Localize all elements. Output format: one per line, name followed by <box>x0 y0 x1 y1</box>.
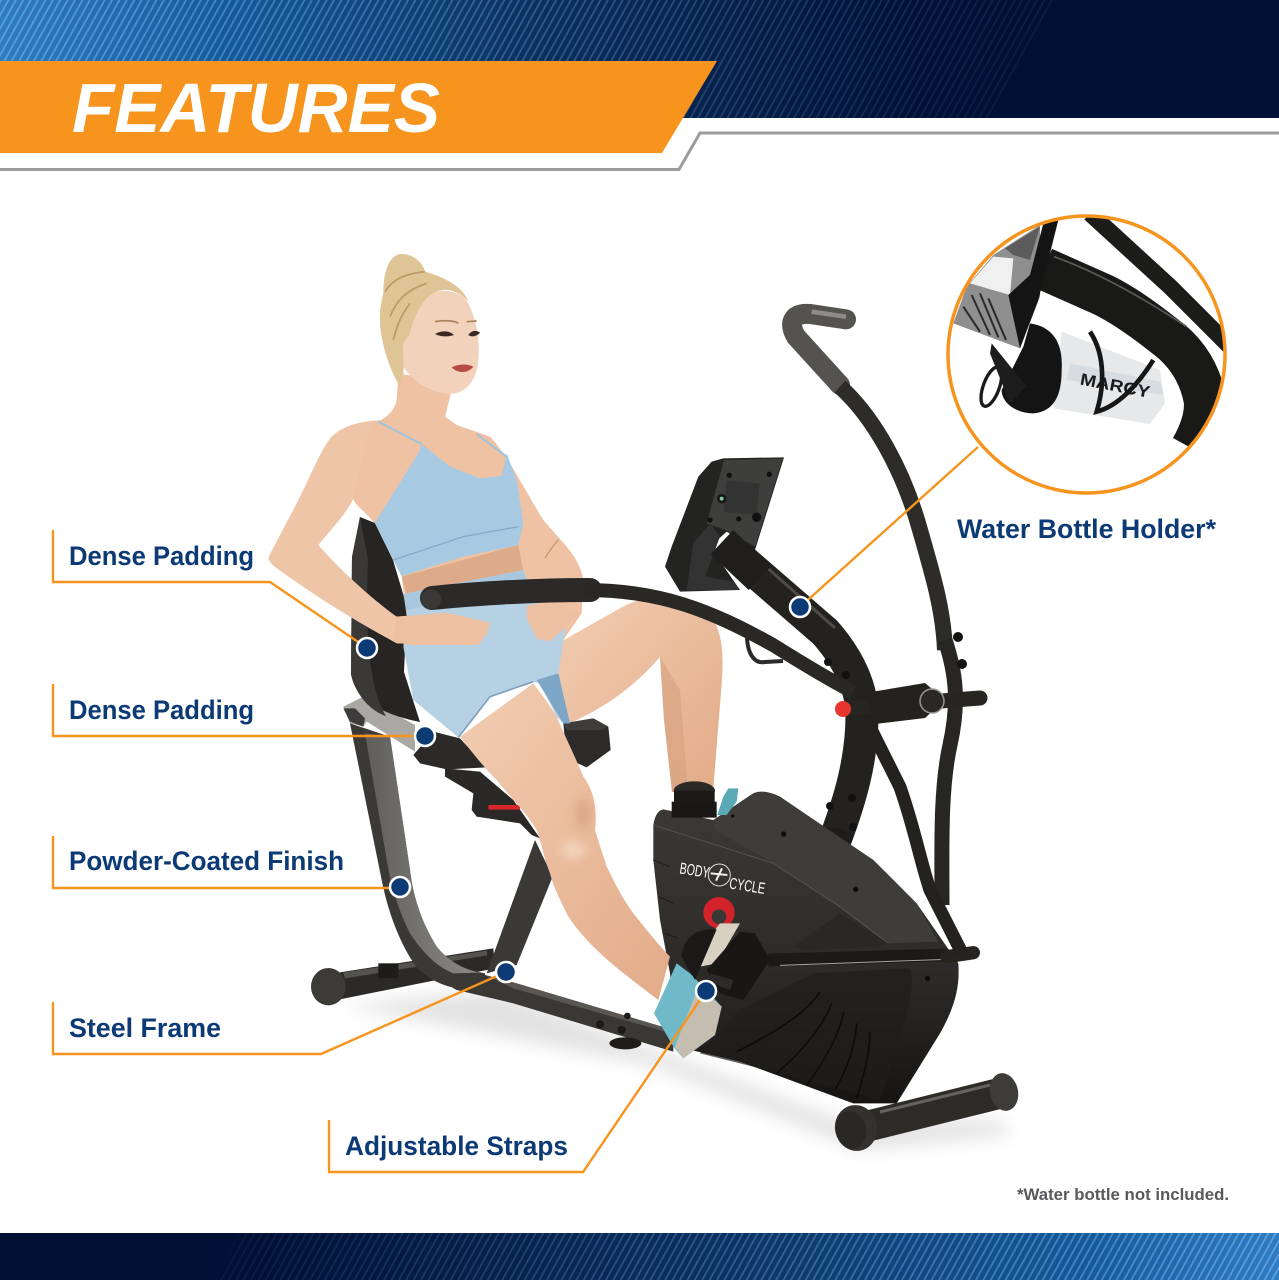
hair <box>380 254 468 387</box>
bolts <box>731 814 930 981</box>
bottom banner <box>0 1233 1279 1280</box>
title ribbon <box>0 61 717 153</box>
shoe <box>654 963 722 1058</box>
hands <box>393 603 580 645</box>
front leg <box>460 683 670 1000</box>
floor shadow <box>340 990 1010 1150</box>
bottle cap <box>1002 323 1062 413</box>
seat carriage <box>445 768 540 838</box>
bottle cage <box>1090 332 1153 412</box>
console corner <box>953 225 1040 348</box>
pedal and shoe <box>654 923 770 1058</box>
marker <box>790 597 810 617</box>
rear frame <box>343 697 487 988</box>
red ring <box>703 897 735 928</box>
front lever and crossbar <box>850 683 980 953</box>
console mast <box>728 548 862 848</box>
header outline <box>0 133 1279 170</box>
foot of raised leg shoe <box>717 788 738 815</box>
exercise bike: rear and base <box>311 697 673 1052</box>
bottle brand: MARCY <box>1079 370 1152 402</box>
marker <box>496 962 516 982</box>
flywheel housing <box>653 781 973 1103</box>
crank arm <box>768 953 973 965</box>
lower panel <box>793 913 888 950</box>
footnote: *Water bottle not included. <box>1017 1185 1229 1204</box>
mast over console <box>722 542 760 578</box>
front stabilizer <box>831 1071 1022 1155</box>
title: FEATURES <box>72 69 440 147</box>
label: Steel Frame <box>69 1013 221 1043</box>
pedal <box>682 929 717 980</box>
seat cushion <box>413 732 487 769</box>
rear handle <box>792 312 945 650</box>
logo: BODY <box>678 860 711 882</box>
marker <box>696 981 716 1001</box>
marker <box>357 638 377 658</box>
ear <box>386 332 404 364</box>
raised leg <box>555 597 723 792</box>
shorts <box>403 570 570 737</box>
seat support strut <box>487 840 553 973</box>
callout: dense padding backrest <box>53 530 377 658</box>
upper tube <box>1090 213 1230 347</box>
label: Dense Padding <box>69 541 254 571</box>
vents <box>737 992 870 1098</box>
console <box>665 457 784 592</box>
housing body <box>653 792 959 1103</box>
upper panel <box>713 792 938 943</box>
label: Dense Padding <box>69 695 254 725</box>
top banner <box>0 0 1279 118</box>
seat <box>413 718 611 838</box>
callout: dense padding seat <box>53 684 435 746</box>
callout: powder-coated finish <box>53 836 410 897</box>
callout: steel frame <box>53 962 516 1054</box>
marker <box>415 726 435 746</box>
base rail <box>427 973 673 1052</box>
marker <box>390 877 410 897</box>
label: Adjustable Straps <box>345 1131 568 1161</box>
callout: adjustable straps <box>329 981 716 1172</box>
water bottle inset <box>948 213 1230 493</box>
torso and neck <box>353 373 583 640</box>
left arm <box>268 420 491 646</box>
woman <box>268 254 670 1000</box>
seat back <box>351 517 420 722</box>
large tube <box>1043 268 1205 448</box>
red button <box>835 701 851 717</box>
rear stabilizer <box>311 948 495 1005</box>
callout: water bottle holder <box>790 447 1216 617</box>
logo: CYCLE <box>728 875 766 898</box>
face <box>399 291 480 394</box>
bottle cage <box>747 638 783 662</box>
bottle <box>977 323 1165 424</box>
main handlebar <box>421 589 853 717</box>
logo <box>678 860 766 898</box>
label: Powder-Coated Finish <box>69 846 344 876</box>
sports bra <box>375 422 523 576</box>
label: Water Bottle Holder* <box>957 514 1216 544</box>
resistance knob <box>672 781 717 818</box>
